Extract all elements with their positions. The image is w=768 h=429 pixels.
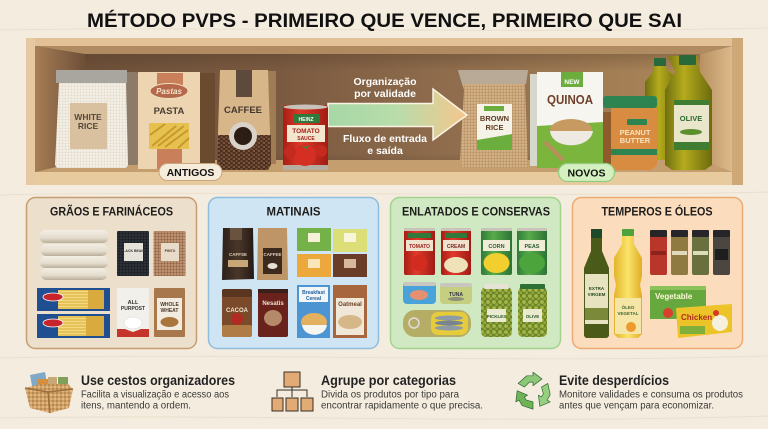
product: peanut butter jar: PEANUT <box>620 128 651 137</box>
description: categorias: encontrar rapidamente o que precisa. <box>321 400 483 412</box>
text: organização por validade <box>353 76 417 100</box>
panel: grãos e farináceos <box>26 198 196 348</box>
product: dark coffee bag <box>222 228 254 280</box>
product: cream can: CREAM <box>447 244 465 250</box>
product: olive oil bottle <box>584 229 609 338</box>
product: white rice bag: RICE <box>78 121 98 131</box>
tip: evite desperdícios <box>511 372 743 415</box>
product: pasta box: Pastas <box>156 87 182 96</box>
product: instant chocolate can: Nesatis <box>262 301 284 307</box>
product: black beans bag: BLACK BEANS <box>121 249 147 253</box>
icon: category hierarchy <box>272 372 313 411</box>
product: kraft coffee bag: CAFFEE <box>264 252 282 257</box>
heading: grãos e farináceos: GRÃOS E FARINÁCEOS <box>50 206 173 218</box>
badge: antigos <box>159 164 222 180</box>
heading: temperos e óleos: TEMPEROS E ÓLEOS <box>602 206 713 218</box>
product: all purpose flour: PURPOST <box>121 306 145 312</box>
description: categorias: Divida os produtos por tipo para <box>321 390 459 400</box>
product: peas can <box>517 228 547 275</box>
product: cacoa jar: CACOA <box>226 308 249 314</box>
product: pasta box <box>138 72 215 169</box>
text: organização por validade: Organização <box>353 76 417 88</box>
product: all purpose flour: ALL <box>128 300 139 306</box>
product: pinto beans bag: PINTO <box>165 249 176 253</box>
product: spice jars <box>650 230 730 275</box>
product: pickles jar: PICKLES <box>487 314 506 319</box>
product: oatmeal box: Oatmeal <box>338 302 362 308</box>
product: vegetable oil bottle: ÓLEO <box>622 303 635 310</box>
product: tomato can <box>404 228 435 275</box>
product: quinoa box: QUINOA <box>547 92 594 107</box>
product: breakfast cereal box: Cereal <box>306 296 322 302</box>
product: pickles jar <box>481 284 512 337</box>
product: peas can: PEAS <box>525 244 540 250</box>
description: desperdícios <box>559 390 743 412</box>
product: brown rice bag: RICE <box>486 123 503 132</box>
product: oatmeal box <box>333 285 367 338</box>
product: coffee bag: CAFFEE <box>224 105 262 116</box>
product: cacoa jar <box>222 289 252 337</box>
text: fluxo de entrada e saída: Fluxo de entrada <box>343 133 427 145</box>
product: corn can: CORN <box>488 244 505 250</box>
product: whole wheat flour: WHOLE <box>160 302 179 308</box>
product: tomato sauce can: TOMATO <box>292 128 320 135</box>
product: white rice bag <box>55 70 138 168</box>
product: instant chocolate can <box>258 289 288 337</box>
product: whole wheat flour: WHEAT <box>161 308 178 314</box>
product: whole wheat flour <box>154 288 185 337</box>
product: breakfast cereal box: Breakfast <box>302 290 325 296</box>
description: desperdícios: antes que vençam para economizar. <box>559 400 714 412</box>
title: MÉTODO PVPS - PRIMEIRO QUE VENCE, PRIMEIRO QUE SAI <box>87 9 682 32</box>
product: tomato sauce can: HEINZ <box>298 117 314 123</box>
icon: basket <box>25 372 73 413</box>
heading: agrupe por categorias: Agrupe por categorias <box>321 372 456 388</box>
product: vegetable oil bottle: VEGETAL <box>618 311 639 316</box>
badge: antigos: ANTIGOS <box>167 167 214 179</box>
heading: matinais: MATINAIS <box>266 206 321 218</box>
arrow: validity flow <box>328 89 467 140</box>
panel: matinais <box>208 198 378 348</box>
product: coffee bag <box>217 70 276 170</box>
product: quinoa box: NEW <box>564 79 580 86</box>
product: chicken bouillon box <box>676 304 732 338</box>
product: vegetable bouillon box: Vegetable <box>655 292 693 301</box>
badge: novos: NOVOS <box>568 168 605 180</box>
product: dark coffee bag: CAFFSE <box>229 252 247 257</box>
text: fluxo de entrada e saída: e saída <box>367 145 403 157</box>
product: sardine tin <box>403 310 471 337</box>
product: black beans bag <box>117 231 149 276</box>
product: all purpose flour <box>117 288 149 337</box>
product: olives jar: OLIVE <box>526 314 539 319</box>
product: vegetable bouillon box <box>650 286 706 319</box>
panel: wooden shelf <box>26 38 743 185</box>
product: olive oil bottles <box>645 55 712 170</box>
tip: use cestos organizadores <box>25 372 235 413</box>
product: tuna cans <box>403 282 472 304</box>
product: corn can <box>481 228 512 275</box>
product: pasta packs <box>37 288 110 338</box>
description: desperdícios: Monitore validades e consuma os produtos <box>559 390 743 400</box>
product: white rice bag: WHITE <box>74 112 102 122</box>
panel: enlatados e conservas <box>390 198 560 348</box>
description: cestos <box>81 390 229 412</box>
product: olive oil bottles: OLIVE <box>680 114 702 123</box>
text: organização por validade: por validade <box>354 88 416 100</box>
product: brown rice bag <box>458 70 528 168</box>
description: categorias <box>321 390 483 412</box>
badge: novos <box>558 164 614 182</box>
icon: recycle <box>511 372 558 415</box>
heading: use cestos organizadores: Use cestos organizadores <box>81 372 235 388</box>
product: cream can <box>441 228 471 275</box>
product: peanut butter jar <box>603 96 657 170</box>
panel: temperos e óleos <box>572 198 742 348</box>
product: breakfast cereal box <box>297 285 330 338</box>
product: pasta box: PASTA <box>154 106 185 117</box>
product: brown rice bag: BROWN <box>480 114 509 123</box>
product: tomato can: TOMATO <box>409 244 430 250</box>
heading: evite desperdícios: Evite desperdícios <box>559 372 669 388</box>
product: olive oil bottle: VIRGEM <box>588 292 606 297</box>
product: tomato sauce can: SAUCE <box>297 136 315 142</box>
product: tea boxes <box>297 228 367 277</box>
description: cestos: itens, mantendo a ordem. <box>81 400 191 412</box>
product: stacked rice sacks <box>40 230 108 280</box>
product: kraft coffee bag <box>257 228 288 280</box>
product: quinoa box <box>530 72 603 168</box>
product: olive oil bottle: EXTRA <box>589 286 605 291</box>
product: tomato sauce can <box>283 104 328 170</box>
product: olives jar <box>518 284 547 337</box>
product: peanut butter jar: BUTTER <box>620 136 651 145</box>
product: chicken bouillon box: Chicken <box>681 313 712 322</box>
product: pinto beans bag <box>154 231 186 276</box>
heading: enlatados e conservas: ENLATADOS E CONSERVAS <box>402 206 550 218</box>
product: tuna cans: TUNA <box>449 292 463 298</box>
tip: agrupe por categorias <box>272 372 483 412</box>
product: vegetable oil bottle <box>614 229 642 338</box>
text: fluxo de entrada e saída <box>343 133 427 157</box>
description: cestos: Facilita a visualização e acesso aos <box>81 390 229 400</box>
